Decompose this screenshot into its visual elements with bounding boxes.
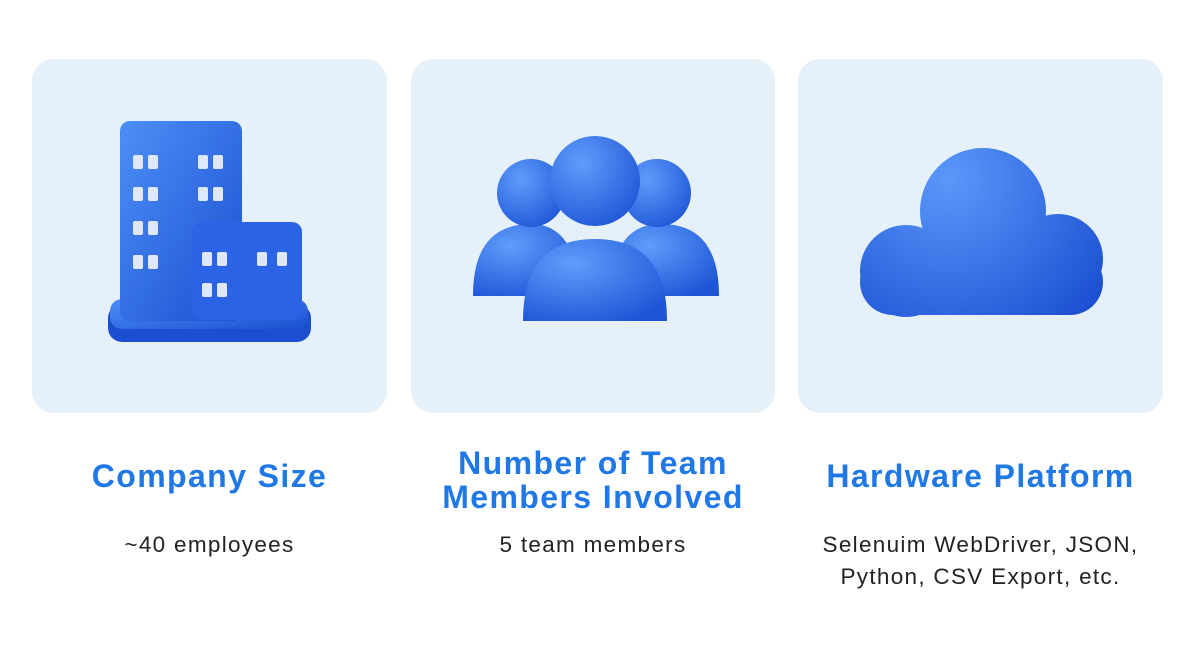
panel: hardware platform <box>798 59 1163 413</box>
title: team members <box>442 445 744 515</box>
title: hardware platform: Hardware Platform <box>826 458 1135 494</box>
text: platform list: Selenuim WebDriver, JSON, <box>823 532 1138 557</box>
icon: cloud <box>860 148 1103 317</box>
panel: company size <box>32 59 387 413</box>
panel: team members <box>411 59 775 413</box>
text: employees: ~40 employees <box>124 532 295 557</box>
icon: building <box>108 121 311 342</box>
icon: people <box>473 136 719 321</box>
text: team members: 5 team members <box>499 532 686 557</box>
text: platform list <box>823 532 1138 589</box>
title: team members: Members Involved <box>442 479 744 515</box>
text: platform list: Python, CSV Export, etc. <box>840 564 1121 589</box>
title: company size: Company Size <box>92 458 327 494</box>
title: team members: Number of Team <box>458 445 728 481</box>
